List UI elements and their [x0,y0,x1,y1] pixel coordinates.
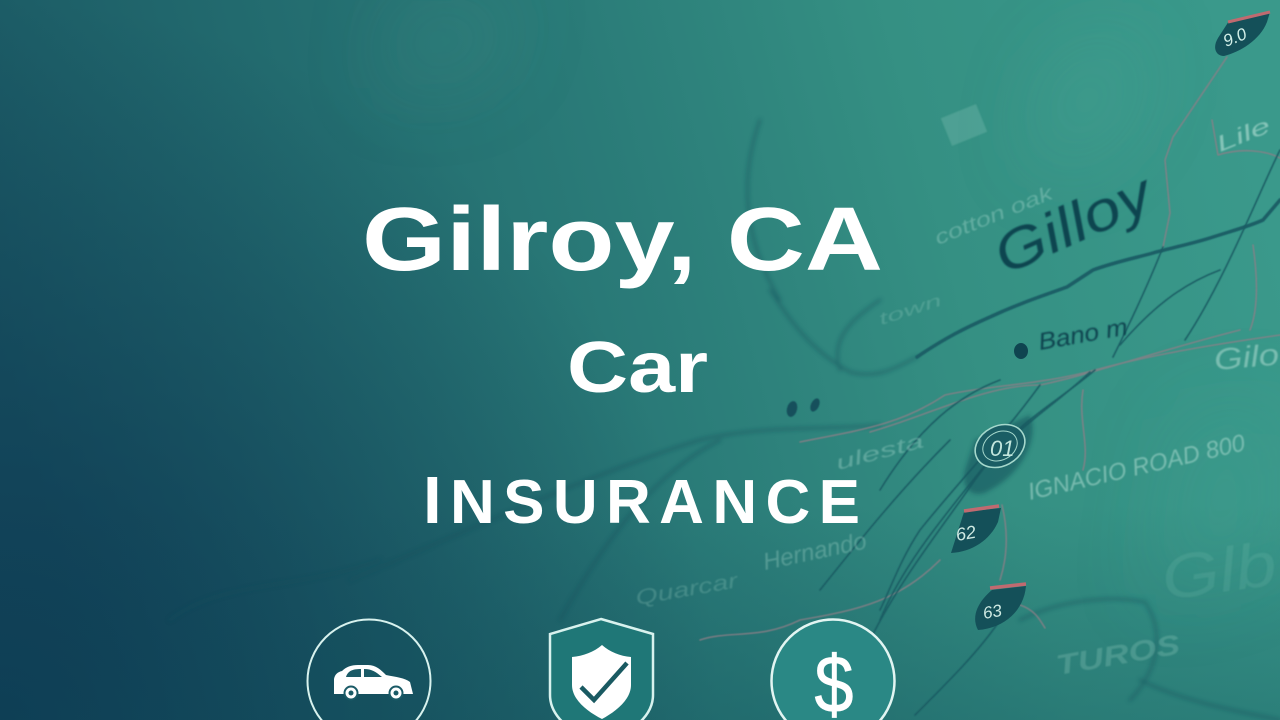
map roads [170,57,1280,720]
highway badge top: 9.0 [1220,24,1250,51]
icon: car in circle [308,620,430,720]
map labels: faint place names [634,104,1280,681]
map label: Gilroy: Gilloy [984,160,1164,286]
highway badge 62 [951,506,1001,553]
map labels: faint place names: Hernando [761,528,869,576]
subtitle: Insurance: INSURANCE [423,463,860,538]
map labels: faint place names: Bano m [1036,314,1130,356]
pink roads [700,57,1280,640]
dark water patch near the highway shield [964,415,1033,494]
main dark road [917,200,1280,357]
map labels: faint place names: IGNACIO ROAD 800 [1025,429,1248,506]
car silhouette [334,665,413,700]
map labels: faint place names: town [876,291,944,329]
map labels: faint place names: ulesta [834,430,926,475]
highway badge 62: 62 [954,522,977,545]
dark roads faded [170,120,1280,720]
map labels: faint place names: Gilo [1213,338,1280,377]
highway badge 63: 63 [981,601,1004,623]
icon: dollar in circle [772,620,894,720]
highway badge 63 [975,584,1026,630]
map labels: faint place names: cotton oak [932,182,1057,250]
map labels: faint place names: TUROS [1054,629,1183,681]
map labels: faint place names: Glb [1157,530,1280,614]
map labels: faint place names: Lile [1213,112,1274,157]
title: Gilroy, CA: Gilroy, CA [362,190,883,290]
highway shield center [968,416,1032,476]
map labels: faint place names: Quarcar [634,569,741,610]
highway badge top [1215,12,1270,56]
map dot [1014,343,1028,359]
subtitle: Car: Car [567,328,708,408]
map terrain patches [380,0,1280,600]
icon: shield with check [550,619,653,720]
dark road bundle [820,150,1280,715]
map pair of lake dots [785,397,822,418]
highway shield center: 01 [990,436,1014,461]
